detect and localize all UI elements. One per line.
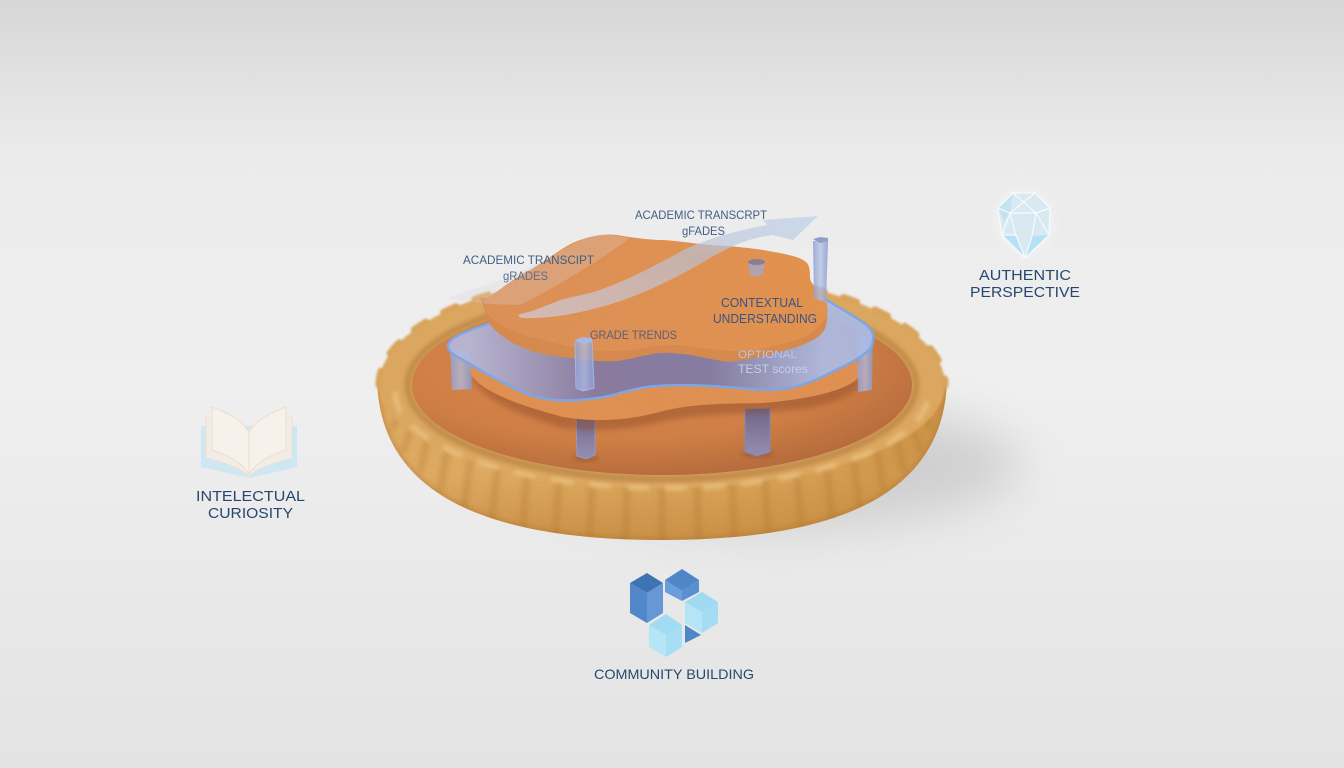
label: grade trends: GRADE TRENDS [590, 330, 677, 342]
rising trend arrow [518, 216, 818, 318]
book blue base [201, 426, 297, 478]
rim inner shade [408, 291, 916, 479]
gem body [998, 193, 1050, 258]
book top pages [212, 407, 286, 474]
cube: mid blue [665, 569, 699, 601]
lower biscuit shadow [470, 375, 862, 430]
gem glow [998, 193, 1050, 258]
icon: open book [201, 407, 297, 478]
upper biscuit layer [480, 235, 828, 362]
crust outer wall [377, 380, 947, 540]
tart shadow [540, 403, 1020, 527]
book outer pages [206, 417, 292, 476]
crust rim top [379, 271, 945, 488]
lower supports [573, 408, 774, 462]
lower biscuit layer [467, 345, 860, 420]
biscuit top surface [484, 235, 828, 351]
support: front plate [575, 337, 594, 391]
cube: light right [685, 592, 718, 633]
label: community building: COMMUNITY BUILDING [594, 666, 754, 682]
support: plate right [857, 332, 873, 392]
crust ribs [378, 388, 946, 540]
label: test scores: TEST scores [738, 362, 808, 376]
icon: community cubes [630, 569, 718, 657]
support: small on biscuit [748, 259, 765, 277]
rear plate supports [450, 332, 873, 392]
label: intellectual curiosity [196, 489, 305, 522]
label: grades left: gRADES [503, 269, 548, 283]
scalloped back edge [379, 271, 945, 385]
biscuit edge [480, 298, 827, 362]
label: academic transcript right: ACADEMIC TRANSCRPT [635, 210, 767, 222]
label: authentic perspective: PERSPECTIVE [970, 285, 1080, 301]
support: lower right [742, 408, 774, 458]
cube: dark blue tall [630, 573, 663, 623]
label: authentic perspective [970, 268, 1080, 301]
label: authentic perspective: AUTHENTIC [979, 268, 1071, 284]
label: optional: OPTIONAL [738, 349, 797, 361]
small triangle [685, 625, 701, 643]
gem facet lines [998, 193, 1050, 258]
translucent glass layer [448, 290, 873, 400]
label: contextual: CONTEXTUAL [721, 296, 803, 310]
support: tall rear [813, 237, 828, 303]
tart crust [374, 283, 950, 540]
tart filling [412, 295, 912, 475]
cube: light bottom [649, 614, 682, 657]
label: grades right: gFADES [682, 224, 725, 238]
support: lower left [573, 412, 599, 462]
icon: crystal gem [998, 193, 1050, 258]
pale translucent overlay on biscuit [445, 235, 630, 305]
tart labels [463, 210, 817, 376]
label: academic transcript left: ACADEMIC TRANSCIPT [463, 255, 594, 267]
label: intellectual curiosity: CURIOSITY [208, 506, 293, 522]
front and top supports [575, 237, 828, 391]
support: plate left [450, 348, 472, 390]
label: intellectual curiosity: INTELECTUAL [196, 489, 305, 505]
label: understanding: UNDERSTANDING [713, 312, 817, 326]
rim highlight ridges [395, 392, 929, 488]
